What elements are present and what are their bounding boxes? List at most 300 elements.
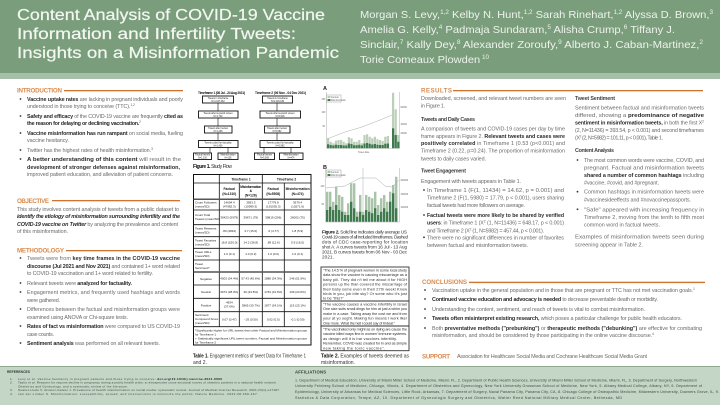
text: introduction: the reason for delaying or declining vaccination. xyxy=(27,121,140,127)
figure 2 caption: Figure 2. Solid line indicates daily average US xyxy=(322,230,407,234)
text: references: Obstetrics and Gynecology, and a systematic review of the literature. xyxy=(18,384,128,388)
chart B: Factual xyxy=(331,171,339,174)
text: support: Association for Healthcare Social Media and Cochrane Healthcare Social Media Grant xyxy=(457,354,648,360)
text: methodology: Tweets were from key time frames in the COVID-19 vaccine xyxy=(27,256,180,262)
table values: 14.2 (36.8) xyxy=(244,240,258,244)
panel: affiliations xyxy=(295,370,719,400)
table row labels: Positive xyxy=(201,304,212,308)
text: tweet engagement xyxy=(421,179,564,249)
heading: introduction: INTRODUCTION xyxy=(17,88,63,94)
table values: -.03 (0.50) xyxy=(244,318,258,322)
text: references: Taylor et al. Reasons for vaccine decline in pregnancy during a public health crisis: a retrospective cross-sectional survey of obstetric patients in a national health network xyxy=(18,381,276,385)
panel: objective xyxy=(17,198,180,235)
text: methodology: Engagement metrics, and frequently used hashtags and words xyxy=(27,290,180,296)
authors: 7 xyxy=(400,40,404,46)
table header: (N=1310) xyxy=(222,192,236,196)
text: conclusions: Tweets often misinterpret existing research, which poses a particular challenge for public health educators. xyxy=(432,316,682,322)
text: affiliations: 1. Department of Medical Education, University of Miami Miller School of Medicine, Miami, FL, 2. Department of Public Health Sciences, University of Miami Miller School of Medicine, Miami, FL, 3. Department of Surgery, Northwestern xyxy=(295,378,697,382)
panel: support xyxy=(422,353,648,360)
bullets: methodology xyxy=(20,257,21,344)
text: methodology: Sentiment analysis was performed on all relevant tweets. xyxy=(27,341,160,347)
text: tweets and daily cases: Timeframe 2 (0.22, p=0.24). The proportion of misinformation xyxy=(421,149,565,155)
table row labels xyxy=(195,200,220,325)
flowchart box text xyxy=(195,97,299,160)
flowchart box text: N=5,982 xyxy=(276,146,285,148)
table values: 119 (25.1%) xyxy=(290,304,306,308)
authors: Sinclair, xyxy=(360,39,397,51)
title: Insights on a Misinformation Pandemic xyxy=(17,45,339,62)
table values: 39671 (79) xyxy=(244,216,258,220)
flowchart box text: N=474 xyxy=(288,158,295,160)
table values: 39819 (296) xyxy=(265,216,281,220)
bullets: content analysis xyxy=(577,159,578,210)
table row labels: Tweet Favorites xyxy=(195,238,217,242)
table row labels: Compound Score xyxy=(195,317,219,321)
table values: 109 (23.0%) xyxy=(289,290,306,294)
text: tweet engagement: (1, N=11436) = 648.17, p < 0.001) xyxy=(486,221,564,227)
text: affiliations xyxy=(295,378,719,400)
table values: 4.7 (15.0) xyxy=(244,229,257,233)
table grid xyxy=(194,174,311,345)
text: affiliations: Epidemiology, University of Arkansas for Medical Sciences, Little Rock, Arkansas, 7. Department of Surgery, Naval Panama City, Panama City, CA, 8. Chicago College of Osteopathic Medicine, Midwestern University, Downers Grove, IL, 9. xyxy=(295,390,719,394)
text: references xyxy=(10,377,280,396)
table values: .6 (4.77) xyxy=(268,229,279,233)
flowchart titles xyxy=(198,91,306,95)
table values: 0.02 (0.5) xyxy=(267,318,280,322)
text: introduction: 1,2 xyxy=(130,103,135,107)
heading: results: RESULTS xyxy=(421,88,452,94)
bullets: introduction xyxy=(20,98,21,160)
flowchart arrows xyxy=(210,103,291,153)
table values: (47982.3) xyxy=(223,204,236,208)
subheading: content analysis: Content Analysis xyxy=(575,148,614,154)
text: references: Suarez-Lledo V, Alvarez-Galvez J. Prevalence of health misinformation on social media: systematic review. Journal of Medical Internet Research. 2021;23(1):e17187. xyxy=(18,388,280,392)
flowchart box text: Factual tweets xyxy=(195,154,211,157)
panel: methodology xyxy=(17,248,182,347)
table header: (N=5508) xyxy=(266,192,280,196)
authors: Amelia G. Kelly, xyxy=(360,24,434,36)
flowchart box text: Tweets in timeframe xyxy=(208,97,229,100)
flowchart box text: N=1,436 xyxy=(214,131,223,133)
figure 2 caption: 2021. xyxy=(322,254,334,260)
text: content analysis: The most common words were vaccine, COVID, and xyxy=(584,158,704,164)
text: introduction: 2 xyxy=(139,120,141,124)
flowchart box text: Tweets after keyword screen xyxy=(265,112,295,115)
table row labels: Tweets (mean/SD) xyxy=(195,217,220,221)
table values xyxy=(220,200,306,322)
text: introduction: Twitter has the highest rates of health misinformation. xyxy=(27,148,151,154)
flowchart titles: Timeframe 1 (08 Jul - 24 Aug 2021) xyxy=(198,91,245,95)
text: results intro: in Figure 1. xyxy=(421,104,445,110)
text: tweet sentiment: sentiment in misinformation tweets, in both the first X xyxy=(575,121,702,127)
flowchart box text: Tweets after keyword screen xyxy=(203,112,233,115)
chart B: 100000 xyxy=(400,207,409,209)
table values: 5.9 (16.0) xyxy=(291,240,304,244)
table footnotes: + Statistically significant URL tweet numbers, Factual and Misinformation groups xyxy=(195,336,308,340)
table row labels: (mean/SD) xyxy=(195,254,210,258)
authors: 5 xyxy=(547,25,552,31)
text: introduction: development of stronger defenses against misinformation, xyxy=(27,165,180,171)
table row labels: (mean/SD) xyxy=(195,321,210,325)
table 2 quotes: new taking the toxic vaccine". xyxy=(323,345,385,350)
text: tweet engagement: There were no significant differences in number of favorites xyxy=(427,235,564,241)
table header: Factual xyxy=(224,187,235,191)
table 2 quotes: "The 14.5 % of pregnant women in some local study xyxy=(323,268,407,272)
table row labels: (mean/SD) xyxy=(195,204,210,208)
flowchart box text: N=1,742 xyxy=(214,116,223,118)
text: tweet sentiment: (2, N=11436) = 393.54, p < 0.001) and second timeframes xyxy=(575,128,704,134)
table values: 4934 xyxy=(226,300,233,304)
chart A: Tweet date xyxy=(358,151,370,154)
chart A: 100 xyxy=(322,112,326,114)
chart A: 150 xyxy=(322,99,326,101)
flowchart box text: Tweets in timeframe xyxy=(267,97,288,100)
table 2 caption: Table 2. Examples of tweets deemed as xyxy=(321,354,410,360)
subheading: tweets and daily cases: Tweets and Daily Cases xyxy=(421,117,475,123)
table 2 quotes: baby pill. They did n't tell me about it for HIGH xyxy=(323,277,407,282)
text: conclusions: 4 xyxy=(652,332,654,336)
authors: Alisha Crump, xyxy=(553,24,624,36)
text: tweets and daily cases: A comparison of tweets and COVID-19 cases per day by time xyxy=(421,126,565,132)
table header: (N=474) xyxy=(292,192,304,196)
text: content analysis: "Safe" appeared with increasing frequency in xyxy=(584,207,704,213)
authors: Sarah Rinehart, xyxy=(536,9,614,21)
flowchart box text: N=2,119,430 xyxy=(271,101,285,103)
table values: (191035.3) xyxy=(266,204,281,208)
table 2 quotes: vaccine killed ways fine in women' immune systems. xyxy=(323,331,407,336)
text: references: 4. xyxy=(10,392,13,396)
flowchart boxes xyxy=(194,96,303,160)
chart A: Misinformation xyxy=(331,99,347,102)
chart A: Factual xyxy=(331,96,339,99)
text: introduction xyxy=(27,97,183,178)
table 2 quotes: persons up the than covered the miscarriage of xyxy=(323,282,408,287)
table 1 caption: Table 1. Engagement metrics of tweet Data for Timeframe 1 xyxy=(193,354,306,360)
flowchart box text: Misinformation xyxy=(284,154,299,157)
table header: Timeframe 2 xyxy=(277,178,296,182)
text: objective: identify the etiology of misinformation surrounding infertility and the xyxy=(17,214,180,220)
table row labels: Tweet URLs xyxy=(195,250,212,254)
table 2 quotes: data show the vaccine is causing miscarriage as a xyxy=(323,272,408,277)
table values: 14694.4 xyxy=(224,200,235,204)
chart B: 150000 xyxy=(400,194,409,196)
flowchart box text: Factual tweets xyxy=(257,154,273,157)
text: conclusions: Vaccination uptake in the general population and in those that are pregnant or TTC has not met vaccination goals. xyxy=(432,288,693,294)
authors: 6 xyxy=(624,25,628,31)
chart B: B xyxy=(323,165,327,171)
table values: 1743 (31.6%) xyxy=(264,290,282,294)
text: tweet sentiment: differed, showing a predominance of negative xyxy=(575,113,704,119)
flowchart box text: Tweets coded for factuality xyxy=(204,142,232,144)
header band xyxy=(0,0,720,79)
text: tweet engagement: Factual tweets were more likely to be shared by verified xyxy=(427,213,564,219)
text: content analysis: pregnant. Factual and misinformation tweets xyxy=(584,165,704,171)
text: affiliations: Statistics & Data Corporation, Tempe, AZ, 10. Department of Gynecologic Surgery and Obstetrics, Walter Reed National Military Medical Center, Bethesda, MD xyxy=(295,396,622,400)
text: references: 3. xyxy=(10,388,13,392)
figure 2 caption: dots of CDC case-reporting for location xyxy=(322,240,408,244)
heading: methodology: METHODOLOGY xyxy=(17,248,65,254)
table header: Timeframe 1 xyxy=(231,178,251,182)
chart A xyxy=(322,86,408,154)
text: tweets and daily cases: frame appears in Figure 2. Relevant tweets and cases were xyxy=(421,134,565,140)
text: introduction: 3 xyxy=(151,147,153,151)
chart A: A xyxy=(323,86,327,92)
panel: introduction xyxy=(17,88,183,178)
text: introduction: A better understanding of this content will result in the xyxy=(27,157,181,163)
authors xyxy=(360,5,714,66)
text: content analysis: common word in factual tweets. xyxy=(584,222,660,228)
chart A: 20000 xyxy=(400,133,408,135)
footer band xyxy=(0,366,720,405)
text: conclusions: Both preventative methods ("prebunking") or therapeutic methods ("debunking") are effective for combating xyxy=(432,326,702,332)
flowchart box text: Misinformation xyxy=(221,154,236,157)
text: tweet sentiment: Sentiment between factual and misinformation tweets xyxy=(575,105,704,111)
table values: 1888 (34.3%) xyxy=(264,276,282,280)
table values: 1.0 (0.0) xyxy=(268,252,279,256)
bullets: tweet engagement xyxy=(423,189,425,238)
table values: (37.6%) xyxy=(224,304,235,308)
flowchart box text: Tweets coded for factuality xyxy=(266,142,294,144)
table values: 1.0 (0.1) xyxy=(224,252,235,256)
text: tweet engagement: In Timeframe 1 (F(1, 11434) = 14.62, p = 0.001) and xyxy=(427,188,564,194)
table 2 quotes: "The vaccinated only might as on dying are cause the xyxy=(323,326,407,332)
figure 2 caption xyxy=(322,230,408,260)
table row labels: Tweet xyxy=(195,262,203,266)
table 1 caption xyxy=(193,354,306,366)
table row labels: Negative xyxy=(200,277,212,281)
text: content analysis: screening appear in Table 2. xyxy=(575,242,643,248)
chart B: 100 xyxy=(320,186,325,188)
table values: 16.8 (150.0) xyxy=(221,240,237,244)
table values: 57.43 (45.6%) xyxy=(241,276,260,280)
authors: 9 xyxy=(558,40,562,46)
text: content analysis: shared a number of common hashtags including xyxy=(584,173,704,179)
authors: Alberto J. Caban-Martinez, xyxy=(564,39,699,51)
text: tweet engagement: 2 xyxy=(470,227,472,231)
text: references: van der Linden S. Misinformation: susceptibility, spread, and interventions to immunize the public. Nature Medicine. 2022;28:460-467. xyxy=(18,392,258,396)
heading: references: REFERENCES xyxy=(7,370,31,374)
table values: -0.1 (0.50) xyxy=(291,318,305,322)
table 2 quotes: birds in you, job bite sky? Or some who it's just xyxy=(323,291,408,296)
table 1: engagement metrics xyxy=(193,174,311,366)
flowchart box text: N=1,047,262 xyxy=(211,101,225,103)
flowchart box text: Tweets after review xyxy=(267,127,287,130)
heading: affiliations: AFFILIATIONS xyxy=(295,370,326,374)
table 2 caption xyxy=(321,354,410,366)
chart B: Misinformation xyxy=(331,174,347,177)
table 2 quotes: as design will it is bar vaccines infertility. xyxy=(323,336,397,341)
table values: 1.0 (0.2) xyxy=(245,252,256,256)
chart A: 50 xyxy=(322,126,326,128)
text: introduction: vaccine hesitancy. xyxy=(27,138,69,144)
authors: 10 xyxy=(480,55,490,61)
table footnotes: for Timeframe 1 xyxy=(195,332,216,336)
text: objective: This study involves content analysis of tweets from a public dataset to xyxy=(17,207,179,213)
authors: 4 xyxy=(439,25,443,31)
text: objective: COVID-19 vaccine on Twitter by analyzing the prevalence and content xyxy=(17,222,178,228)
flowchart box text: N=1,436 xyxy=(214,146,223,148)
text: introduction: improved patient education, and alleviation of patient concerns. xyxy=(27,172,173,178)
table values: 3673 (28.0%) xyxy=(220,290,238,294)
table values: .80 (2842) xyxy=(222,229,236,233)
text: conclusions: misinformation, and should be considered by those participating in the online vaccine discourse. xyxy=(432,333,652,339)
figure 1 caption: Figure 1. Study Flow xyxy=(193,164,232,170)
table footnotes xyxy=(195,328,308,344)
text: tweet sentiment: 2 xyxy=(579,134,581,138)
table footnotes: for Timeframe 2 xyxy=(195,340,216,344)
flowchart box text: N=5,982 xyxy=(273,131,282,133)
text: references: 2. xyxy=(10,381,13,385)
table 2 quotes: make in a case. Taking away the cost we and from xyxy=(323,311,407,316)
figure 2: tweet and case charts xyxy=(320,86,409,260)
table values: 1.0 (0.1) xyxy=(292,252,303,256)
authors: 2 xyxy=(699,40,704,46)
text: objective xyxy=(17,207,180,235)
authors: Padmaja Sundaram, xyxy=(445,24,547,36)
subheading: tweet engagement: Tweet Engagement xyxy=(421,169,466,175)
figure 2 caption: shot A. A curves tweets from 16 Jul - 13 Aug xyxy=(322,244,407,250)
heading: support: SUPPORT xyxy=(422,353,450,360)
text: methodology: Differences between the factual and misinformation groups were xyxy=(27,307,180,313)
text: tweet sentiment: (2, N=5982) = 101.11, p < 0.001), Table 1. xyxy=(581,135,663,141)
text: methodology: Relevant tweets were analyzed for factuality. xyxy=(27,281,132,287)
table values: 1.8 (5.9) xyxy=(292,229,303,233)
authors: Morgan S. Levy, xyxy=(360,9,436,21)
text: content analysis: Timeframe 2, moving from the tenth to fifth most xyxy=(584,215,704,221)
chart B xyxy=(320,165,409,222)
flowchart box text: Tweets after review xyxy=(208,127,228,130)
text: references: 1. xyxy=(10,377,13,381)
text: results intro: Downloaded, screened, and relevant tweet numbers are seen xyxy=(421,96,566,102)
table footnotes: *Significantly higher for URL tweets than other Factual and Misinformation groups xyxy=(195,328,308,332)
subheading: tweet sentiment: Tweet Sentiment xyxy=(575,96,615,102)
table values: .89 (12.6) xyxy=(267,240,280,244)
text: content analysis: #vaccinesideeffects and #novaccinepassports. xyxy=(584,197,691,203)
table header: (N=126) xyxy=(245,194,257,198)
authors: Tiffany J. xyxy=(630,24,675,36)
text: tweets and daily cases: tweets to daily cases varied. xyxy=(421,156,486,162)
text: methodology: examined using ANOVA or Chi-square tests. xyxy=(27,315,128,321)
table header: & xyxy=(250,189,253,193)
table row labels: (mean/SD) xyxy=(195,230,210,234)
authors: Alexander Zoroufy, xyxy=(463,39,558,51)
text: methodology: Rates of fact vs misinformation were compared to US COVID-19 xyxy=(27,324,180,330)
text: methodology: discourse (Jul 2021 and Nov 2021) and contained 1+ word related xyxy=(27,264,180,270)
table row labels: Count Total xyxy=(195,213,210,217)
table 2 quotes: their baby some even in their 27th week! Know xyxy=(323,286,407,291)
text: tweet engagement: Engagement with tweets appears in Table 1. xyxy=(421,179,521,185)
table values: 30 (23.8%) xyxy=(243,290,258,294)
table header xyxy=(222,178,310,198)
chart B: 50 xyxy=(322,204,325,206)
text: introduction: Safety and efficacy of the COVID-19 vaccine are frequently cited as xyxy=(27,114,183,120)
flowchart box text: N=5,508 xyxy=(260,158,270,160)
text: tweet engagement: users: in Timeframe 1 (X xyxy=(427,221,484,227)
text: methodology: to COVID-19 vaccination and 1+ word related to fertility. xyxy=(27,271,153,277)
authors: 8 xyxy=(457,40,461,46)
title: Content Analysis of COVID-19 Vaccine xyxy=(17,7,325,24)
figure 2 caption: Covid-19 cases of all included timeframes. Dashed xyxy=(322,234,408,240)
text: methodology: were gathered. xyxy=(26,298,60,304)
text: introduction: understood in those trying to conceive (TTC). xyxy=(27,104,130,110)
chart B: 200000 xyxy=(400,180,409,182)
table header: Misinformation xyxy=(240,185,261,189)
text: tweets and daily cases xyxy=(421,126,565,162)
chart A: 40000 xyxy=(400,124,408,126)
authors: 1,2 xyxy=(524,10,533,16)
text: tweet sentiment: 2 xyxy=(702,120,704,124)
table 2 quotes xyxy=(323,268,408,350)
table row labels: Count Followers xyxy=(195,200,217,204)
text: content analysis: #vaccine, #covid, and #pregnant. xyxy=(584,181,659,187)
table 2: misinformation tweet examples xyxy=(321,267,410,366)
title: Information and Infertility Tweets: xyxy=(17,26,296,43)
table values: 26002 (75) xyxy=(290,216,305,220)
text: content analysis: Common hashtags in misinformation tweets were xyxy=(584,190,704,196)
table 2 caption: misinformation. xyxy=(321,360,355,366)
authors: Alyssa D. Brown, xyxy=(625,9,709,21)
table row labels: Sentiment xyxy=(195,313,209,317)
text: introduction: Vaccine uptake rates are lacking in pregnant individuals and poorly xyxy=(27,97,183,103)
table 2 quotes: "The vaccine causes a vaccine infertility in Israel xyxy=(323,302,407,306)
table values: 3593.3 xyxy=(246,200,256,204)
table 1 caption: and 2. xyxy=(193,360,207,366)
authors: 1,2 xyxy=(614,10,623,16)
text: affiliations: University Feinberg School of Medicine, Chicago, Illinois, 4. Department of Obstetrics and Gynecology, New York University Grossman School of Medicine, New York, 5. Albany Medical College, Albany, NY, 6. Department of xyxy=(295,384,703,388)
authors: Kally Dey, xyxy=(407,39,457,51)
title xyxy=(17,7,339,62)
table values: 246 (51.9%) xyxy=(289,276,306,280)
flowchart box text: N=6,918 xyxy=(276,116,285,118)
text: content analysis: Examples of misinformation tweets seen during xyxy=(575,235,704,241)
text: methodology xyxy=(26,256,180,347)
table header: Misinformation xyxy=(286,187,310,191)
table values: (10999.3) xyxy=(244,204,257,208)
flowchart titles: Timeframe 2 (06 Nov - 04 Dec 2021) xyxy=(255,91,306,95)
authors: Torie Comeaux Plowden xyxy=(360,54,474,66)
text: introduction: Vaccine misinformation has run rampant on social media, fueling xyxy=(27,131,183,137)
table values: 0.07 (0.47) xyxy=(222,318,237,322)
text: tweet engagement: and Timeframe 2 (X xyxy=(427,228,470,234)
flowchart box text: N=1,310 xyxy=(198,158,208,160)
table 2 quotes: Remember, COVID was created for in and as simple xyxy=(323,341,407,346)
table row labels: (mean/SD) xyxy=(195,242,210,246)
text: conclusions: Understanding the content, sentiment, and reach of tweets is vital to combat misinformation. xyxy=(432,307,645,313)
table row labels: Neutral xyxy=(201,290,211,294)
panel: conclusions xyxy=(422,279,705,339)
table values: 3865 (30.7%) xyxy=(242,304,260,308)
bullets: conclusions xyxy=(424,289,426,329)
panel: references xyxy=(7,370,280,396)
heading: objective: OBJECTIVE xyxy=(17,198,49,205)
text: tweets and daily cases: positively correlated in Timeframe 1 (0.53 (p<0.001) and xyxy=(421,141,565,147)
panel: results xyxy=(421,88,704,249)
table 2 quotes: your at yo ought. Making fun means I work like! xyxy=(323,316,407,321)
table values: 1877 (34.1%) xyxy=(264,304,282,308)
table values: 17779.8 xyxy=(268,200,279,204)
text: conclusions: 1 xyxy=(693,287,695,291)
text: references: Levy et al. Vaccine hesitancy in pregnant patients and those trying to conceive: doi.org/10.1016/j.vaccine.2021.0000 xyxy=(18,377,222,381)
heading: conclusions: CONCLUSIONS xyxy=(422,279,467,286)
text: tweet sentiment xyxy=(575,105,704,141)
table 2 quotes: One more. What the hell I could say of it ideal." xyxy=(323,320,396,325)
authors: 1,2 xyxy=(440,10,450,16)
table values: 3679.4 xyxy=(293,200,303,204)
table header: Factual xyxy=(268,187,279,191)
text: objective: of this misinformation. xyxy=(17,229,68,235)
text: tweet engagement: (1, N=5982) = 457.44, p < 0.001). xyxy=(471,228,544,234)
text: tweet engagement: 2 xyxy=(484,220,486,224)
